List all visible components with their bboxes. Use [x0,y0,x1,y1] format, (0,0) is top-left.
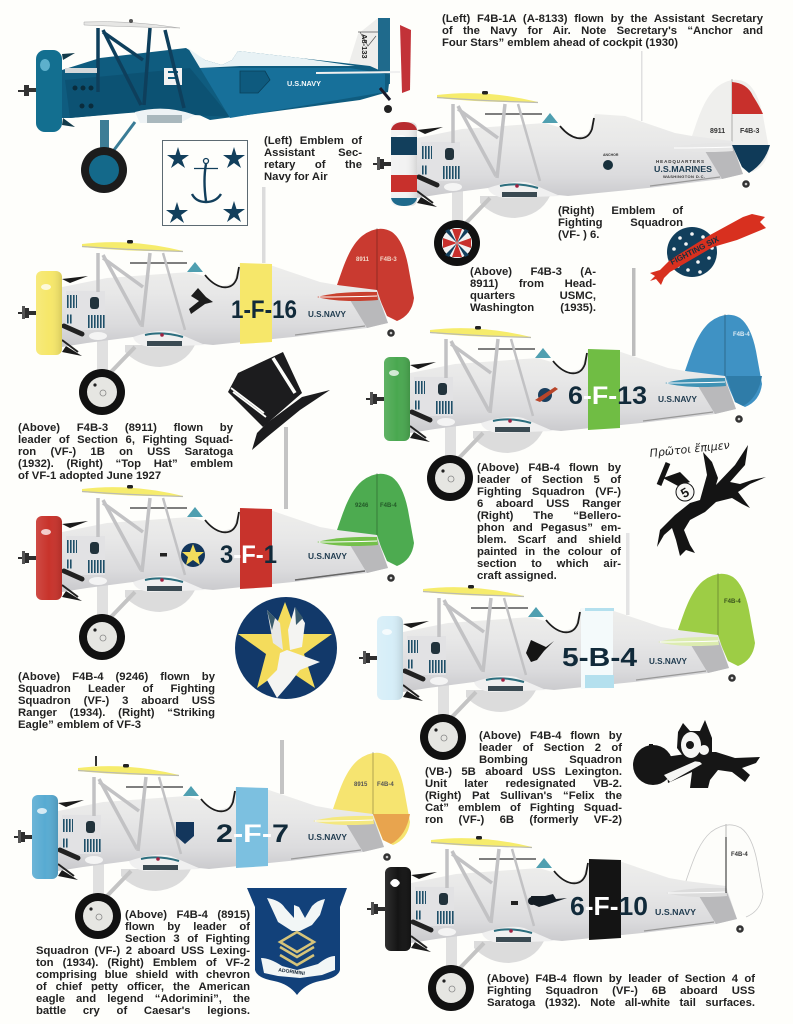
plane: F4B-4 6-F-13: U.S.NAVY [658,395,698,404]
plane: F4B-4 5-B-4 [359,533,755,760]
emblem: Bellerophon and Pegasus [649,439,766,556]
plane: USMC F4B-3 A-8911: ANCHOR [603,153,619,157]
caption: F4B-4 6-F-13 [477,462,622,582]
caption: F4B-4 5-B-4: ron (VF-) 6B (formerly VF-2) [425,814,622,826]
plane: F4B-3 1-F-16: U.S.NAVY [308,310,347,319]
plane: USMC F4B-3 A-8911: HEADQUARTERS [656,159,704,164]
caption: F4B-4 6-F-10: (Above) F4B-4 flown by leader of Section 4 of [487,973,755,985]
plane: F4B-4 5-B-4: U.S.NAVY [649,657,688,666]
caption: F4B-3 1-F-16: leader of Section 6, Fighting Squad- [18,434,233,446]
plane: F4B-3 1-F-16: 1-F-16 [231,296,297,324]
plane: USMC F4B-3 A-8911: 8911 [710,128,725,135]
caption: F4B-4 6-F-13: (Above) F4B-4 flown by [477,462,621,474]
caption: F4B-3 USMC [470,266,596,314]
caption: F4B-4 2-F-7: Squadron (VF-) 2 aboard USS Lexing- [36,945,250,957]
caption: VF-6 emblem [558,205,684,241]
caption: F4B-4 6-F-10: Fighting Squadron (VF-) 6B aboard USS [487,985,755,997]
caption: F4B-3 USMC: (Above) F4B-3 (A- [470,266,596,278]
emblem: VF-2 shield [247,888,347,995]
caption: F4B-4 5-B-4: (Right) Pat Sullivan's “Felix the [425,790,622,802]
emblem: Striking Eagle [235,597,337,699]
caption: F4B-3 1-F-16: (Above) F4B-3 (8911) flown by [18,422,233,434]
caption: F4B-4 3-F-1: (Above) F4B-4 (9246) flown by [18,671,215,683]
emblem: Fighting Six: FIGHTING SIX [669,234,721,267]
caption: F4B-4 3-F-1: Ranger (1934). (Right) “Striking [18,707,215,719]
plane: F4B-4 6-F-10: U.S.NAVY [655,908,697,917]
caption: Assistant Secretary emblem: Assistant Sec- [264,147,362,159]
caption: F4B-4 2-F-7: battle cry of Caesar's legions. [36,1005,250,1017]
caption: F4B-1A: (Left) F4B-1A (A-8133) flown by the Assistant Secretary [442,13,763,25]
plane: F4B-4 6-F-13: 6-F-13 [568,382,647,410]
plane: F4B-4 3-F-1: 9246 [355,503,369,509]
plane: F4B-3 1-F-16: 8911 [356,257,370,263]
caption: F4B-4 2-F-7 [36,909,250,1017]
caption: F4B-4 5-B-4: Cat” emblem of Fighting Squad- [425,802,622,814]
plane: F4B-4 2-F-7 [14,740,410,939]
caption: F4B-4 6-F-13: phon and Pegasus” em- [477,522,621,534]
caption: F4B-4 5-B-4 [425,730,622,826]
caption: F4B-3 1-F-16: ron (VF-) 1B on USS Saratoga [18,446,233,458]
caption: F4B-4 2-F-7: eagle and legend “Adorimini”, the [36,993,250,1005]
plane: F4B-4 6-F-13: F4B-4 [733,332,750,338]
caption: F4B-4 2-F-7: (Above) F4B-4 (8915) [125,909,250,921]
plane: F4B-4 6-F-10: 6-F-10 [570,891,648,921]
caption: Assistant Secretary emblem: retary of the [264,159,362,171]
plane: blue F4B-1A A-8133: U.S.NAVY [287,79,321,88]
caption: F4B-4 6-F-13: blem. Scarf and shield [477,534,621,546]
caption: F4B-4 6-F-13: painted in the colour of [477,546,621,558]
plane: F4B-4 6-F-10: F4B-4 [731,852,748,858]
caption: F4B-4 5-B-4: leader of Section 2 of [479,742,622,754]
caption: F4B-1A [442,13,763,49]
caption: F4B-4 6-F-10: Saratoga (1932). Note all-white tail surfaces. [487,997,755,1009]
plane: F4B-4 5-B-4: F4B-4 [724,599,741,605]
caption: F4B-4 2-F-7: ton (1934). (Right) Emblem of VF-2 [36,957,250,969]
caption: Assistant Secretary emblem [264,135,362,183]
plane: F4B-4 2-F-7: 8915 [354,782,368,788]
caption: VF-6 emblem: (Right) Emblem of [558,205,683,217]
caption: F4B-3 1-F-16 [18,422,234,482]
plane: F4B-4 2-F-7: U.S.NAVY [308,833,348,842]
plane: F4B-4 2-F-7: F4B-4 [377,782,394,788]
emblem: Bellerophon and Pegasus: Πρῶτοι ἔπιμεν [649,439,730,460]
caption: F4B-3 USMC: Washington (1935). [470,302,596,314]
emblem: anchor and four stars [162,140,248,226]
plane: blue F4B-1A A-8133: A8-133 [360,34,369,59]
caption: F4B-4 5-B-4: Unit later redesignated VB-2. [425,778,622,790]
plane: F4B-4 3-F-1 [18,427,414,660]
caption: F4B-4 3-F-1: Squadron Leader of Fighting [18,683,215,695]
caption: F4B-4 2-F-7: Section 3 of Fighting [125,933,250,945]
caption: F4B-4 5-B-4: (VB-) 5B aboard USS Lexington. [425,766,622,778]
plane: F4B-4 3-F-1: 3-F-1 [220,541,277,569]
caption: F4B-4 2-F-7: of chief petty officer, the American [36,981,250,993]
emblem: Bellerophon and Pegasus: 5 [678,484,692,501]
caption: F4B-4 3-F-1 [18,671,215,731]
plane: F4B-4 6-F-10 [367,824,763,1011]
caption: F4B-4 2-F-7: flown by leader of [125,921,250,933]
caption: F4B-4 6-F-10 [487,973,756,1009]
caption: F4B-4 6-F-13: craft assigned. [477,570,557,582]
caption: VF-6 emblem: (VF- ) 6. [558,229,599,241]
plane: USMC F4B-3 A-8911: U.S.MARINES [654,165,713,174]
emblem: Fighting Six [650,214,766,285]
plane: F4B-4 6-F-13 [366,268,762,501]
plane: USMC F4B-3 A-8911 [373,51,770,266]
caption: F4B-1A: Four Stars” emblem ahead of cockpit (1930) [442,37,678,49]
caption: F4B-4 6-F-13: leader of Section 5 of [477,474,621,486]
plane: F4B-4 3-F-1: F4B-4 [380,503,397,509]
caption: Assistant Secretary emblem: Navy for Air [264,171,328,183]
caption: F4B-4 6-F-13: Fighting Squadron (VF-) [477,486,621,498]
caption: VF-6 emblem: Fighting Squadron [558,217,683,229]
caption: F4B-1A: of the Navy for Air. Note Secretary's “Anchor and [442,25,763,37]
caption: F4B-3 1-F-16: (1932). (Right) “Top Hat” emblem [18,458,233,470]
caption: F4B-4 2-F-7: comprising blue shield with chevron [36,969,250,981]
caption: F4B-4 6-F-13: section to which air- [477,558,621,570]
plane: USMC F4B-3 A-8911: WASHINGTON D.C. [663,174,705,179]
plane: F4B-4 3-F-1: U.S.NAVY [308,552,348,561]
plane: F4B-3 1-F-16: F4B-3 [380,257,397,263]
emblem: Felix the Cat [633,720,760,788]
caption: F4B-4 3-F-1: Eagle” emblem of VF-3 [18,719,141,731]
emblem: Top Hat [228,352,330,450]
caption: Assistant Secretary emblem: (Left) Emblem of [264,135,362,147]
caption: F4B-4 5-B-4: Bombing Squadron [479,754,622,766]
caption: F4B-4 5-B-4: (Above) F4B-4 flown by [479,730,622,742]
caption: F4B-3 USMC: 8911) from Head- [470,278,596,290]
caption: F4B-4 6-F-13: 6 aboard USS Ranger [477,498,621,510]
plane: F4B-4 2-F-7: 2-F- 7 [216,820,289,848]
caption: F4B-3 1-F-16: of VF-1 adopted June 1927 [18,470,161,482]
caption: F4B-4 3-F-1: Squadron (VF-) 3 aboard USS [18,695,215,707]
plane: USMC F4B-3 A-8911: F4B-3 [740,128,760,135]
caption: F4B-3 USMC: quarters USMC, [470,290,596,302]
emblem: VF-2 shield: ADORIMINI [278,967,306,977]
caption: F4B-4 6-F-13: (Right) The “Bellero- [477,510,621,522]
plane: F4B-3 1-F-16 [18,187,414,415]
plane: blue F4B-1A A-8133 [18,18,411,193]
plane: F4B-4 5-B-4: 5-B-4 [562,642,638,672]
